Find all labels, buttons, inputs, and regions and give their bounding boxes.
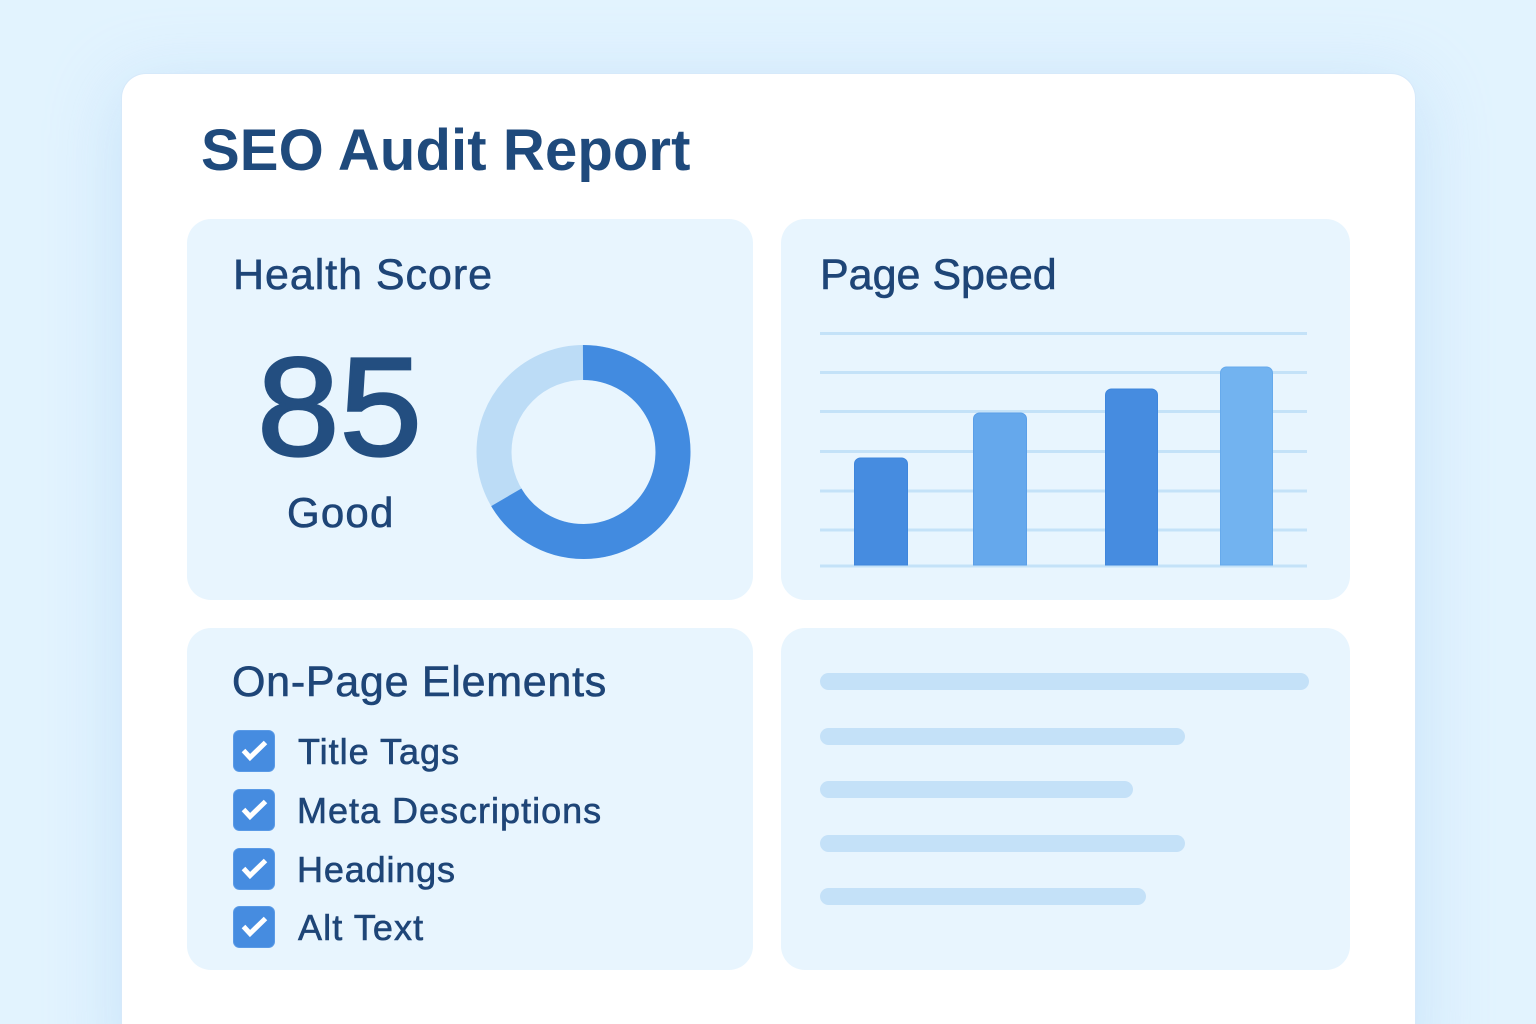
donut chart [476,345,690,559]
placeholder line 5 [820,888,1146,905]
checklist item: meta descriptions: Meta Descriptions [297,790,602,831]
bar chart [820,332,1307,568]
checklist item: headings: Headings [297,849,456,890]
placeholder line 3 [820,781,1133,798]
title: SEO Audit Report [201,118,691,183]
score label: Good [287,489,395,536]
checklist item: headings [233,848,456,890]
checklist item: title tags: Title Tags [298,731,460,772]
placeholder line 2 [820,728,1185,745]
checklist item: title tags [233,730,460,772]
checklist item: alt text [233,906,424,948]
score number: 85 [257,328,422,485]
panel: on-page elements [187,628,753,970]
heading: on-page elements: On-Page Elements [232,658,607,706]
report card [122,74,1415,1024]
panel: health score [187,219,753,600]
panel: page speed [781,219,1350,600]
heading: health score: Health Score [233,251,493,299]
checklist item: alt text: Alt Text [298,907,424,948]
placeholder line 4 [820,835,1185,852]
panel: placeholder lines [781,628,1350,970]
heading: page speed: Page Speed [820,251,1057,299]
placeholder line 1 [820,673,1309,690]
